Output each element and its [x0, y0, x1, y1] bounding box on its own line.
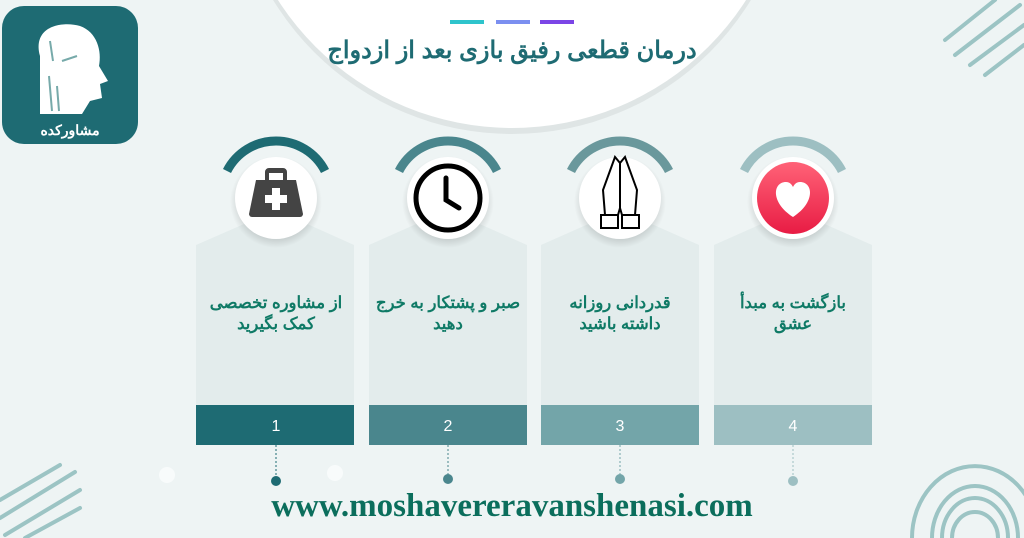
card 2 — [369, 141, 527, 484]
icon: heart — [757, 162, 829, 234]
text card 2: صبر و پشتکار به خرج — [376, 294, 520, 312]
card 1 — [196, 141, 354, 486]
text card 2: دهید — [433, 315, 463, 333]
decorative arcs bottom right — [912, 466, 1024, 538]
numbers — [272, 418, 798, 435]
text card 1: از مشاوره تخصصی — [210, 294, 342, 312]
text card 4: بازگشت به مبدأ — [740, 294, 846, 312]
title: درمان قطعی رفیق بازی بعد از ازدواج — [327, 37, 697, 64]
numbers: 1 — [272, 418, 281, 435]
text card 3 — [569, 294, 671, 333]
decorative hatch top right — [945, 0, 1024, 75]
title dashes — [450, 20, 574, 24]
text card 1 — [210, 294, 342, 334]
logo: مشاورکده — [40, 122, 100, 139]
logo — [2, 6, 138, 144]
numbers: 4 — [789, 418, 798, 435]
top white circle — [232, 0, 792, 134]
card 3 — [541, 141, 699, 484]
icon: clock — [416, 166, 480, 230]
text card 2 — [376, 294, 520, 333]
card 4 — [714, 141, 872, 486]
white dots — [159, 465, 343, 483]
text card 3: داشته باشید — [579, 315, 661, 333]
text card 1: کمک بگیرید — [237, 315, 315, 333]
text card 3: قدردانی روزانه — [569, 294, 671, 312]
website: www.moshavereravanshenasi.com — [271, 488, 753, 524]
numbers: 3 — [616, 418, 625, 435]
numbers: 2 — [444, 418, 453, 435]
icon: medical bag — [249, 168, 303, 217]
text card 4: عشق — [774, 315, 812, 333]
icon: praying hands — [601, 157, 639, 228]
text card 4 — [740, 291, 846, 334]
decorative hatch bottom left — [0, 465, 80, 538]
